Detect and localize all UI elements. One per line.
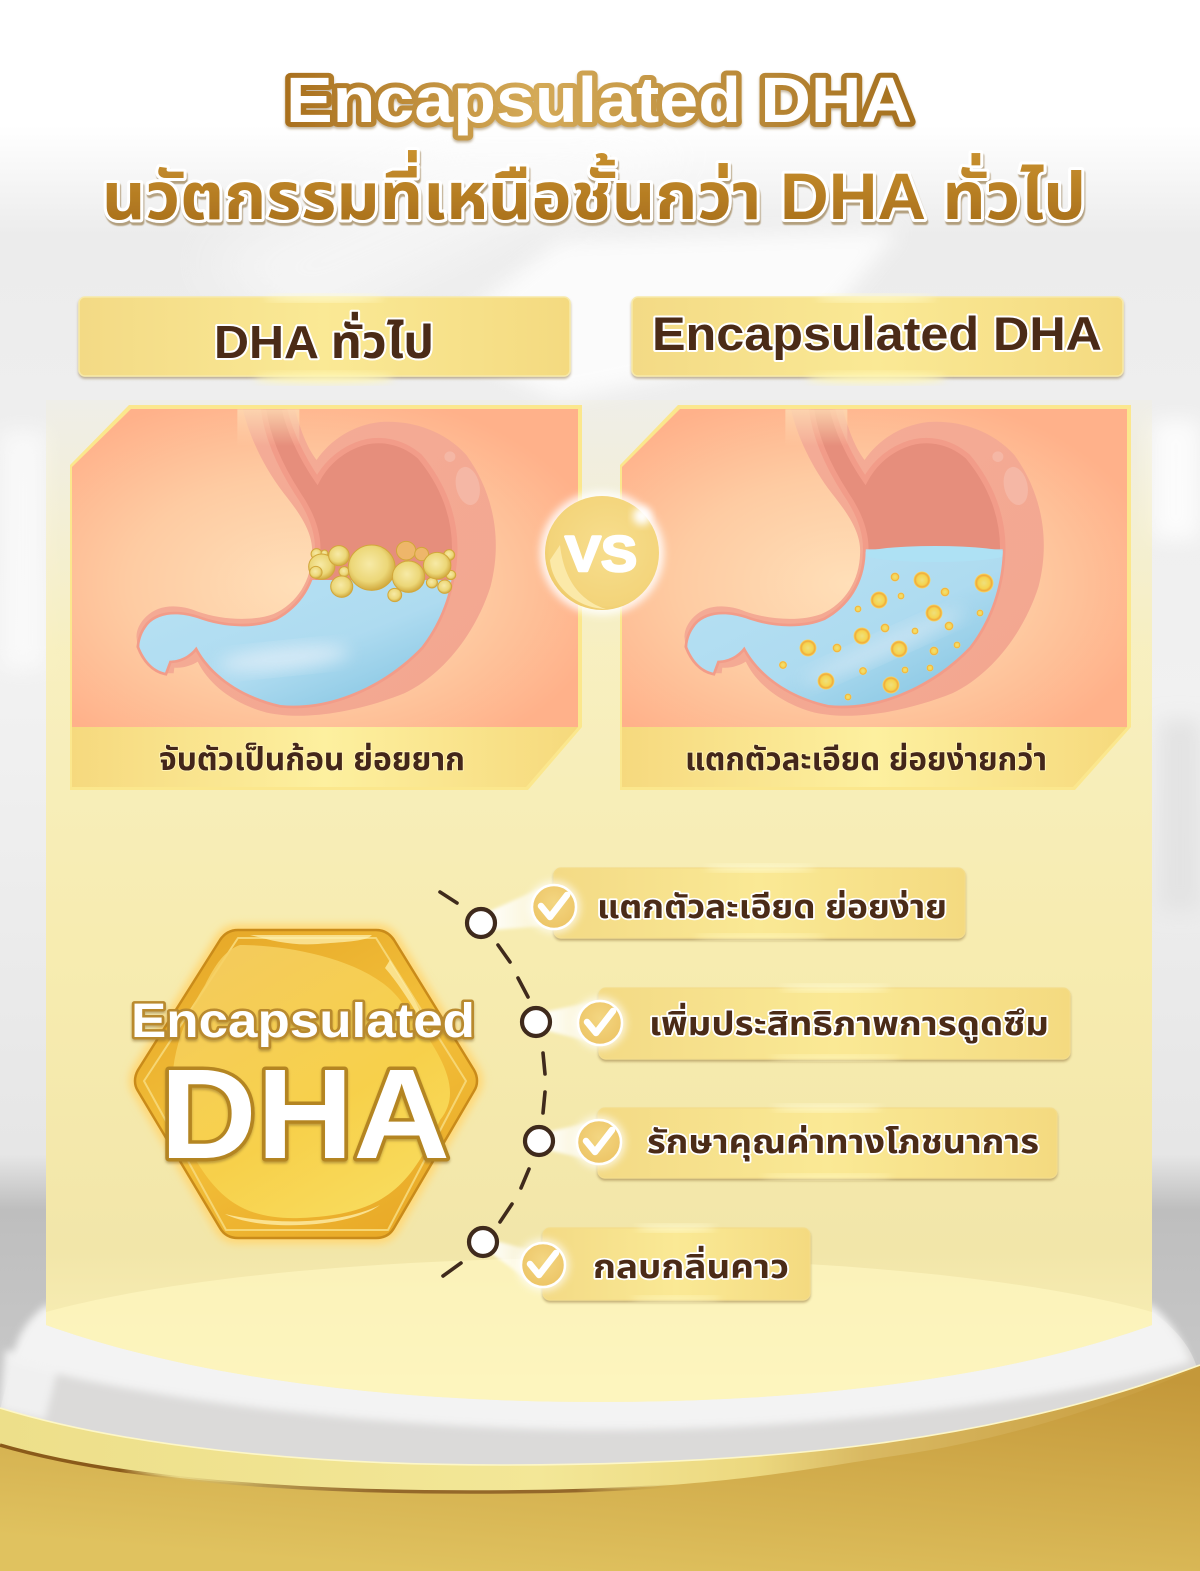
icon: check 3 <box>573 1116 625 1168</box>
badge word: DHA: DHA <box>160 1043 450 1186</box>
dissolved DHA droplets <box>779 572 994 700</box>
translucent yellow panel <box>46 400 1152 1402</box>
caption strip left <box>72 727 578 787</box>
panel: encapsulated DHA stomach <box>620 405 1131 790</box>
caption strip right <box>622 727 1127 787</box>
benefit pill 3 <box>573 1105 1057 1180</box>
gold wave footer <box>0 1365 1200 1571</box>
benefit pill 4: กลบกลิ่นคาว <box>593 1245 789 1285</box>
benefit pill 1: แตกตัวละเอียด ย่อยง่าย <box>597 888 947 925</box>
VS badge <box>540 491 664 615</box>
honeycomb badge: Encapsulated DHA <box>131 930 477 1238</box>
title line 2: นวัตกรรมที่เหนือชั้นกว่า DHA ทั่วไป <box>102 150 1086 233</box>
stomach illustration left <box>129 406 496 720</box>
panel: general DHA stomach <box>70 405 582 790</box>
header: DHA general: DHA ทั่วไป <box>214 312 434 368</box>
podium top ellipse <box>46 1258 1152 1402</box>
dashed timeline with nodes <box>440 886 590 1282</box>
VS badge: VS <box>565 526 637 582</box>
stomach illustration right <box>677 406 1044 723</box>
title <box>102 64 1086 233</box>
header: Encapsulated DHA: Encapsulated DHA <box>652 307 1102 360</box>
icon: check 1 <box>528 881 580 933</box>
benefit pill 2 <box>574 985 1070 1060</box>
caption strip left: จับตัวเป็นก้อน ย่อยยาก <box>159 741 465 777</box>
gold DHA clump <box>309 541 456 602</box>
white podium <box>0 1305 1200 1480</box>
icon: check 4 <box>517 1239 569 1291</box>
icon: check 2 <box>574 997 626 1049</box>
benefit pill 3: รักษาคุณค่าทางโภชนาการ <box>647 1123 1039 1162</box>
benefit pill 2: เพิ่มประสิทธิภาพการดูดซึม <box>649 1002 1049 1044</box>
header: Encapsulated DHA <box>632 295 1123 383</box>
badge word: Encapsulated: Encapsulated <box>131 995 475 1048</box>
beams from nodes to check icons <box>488 886 590 1282</box>
benefit pill 1 <box>528 865 965 940</box>
header: DHA general <box>79 295 570 383</box>
benefit pill 4 <box>517 1225 810 1302</box>
title line 1: Encapsulated DHA <box>286 64 912 136</box>
caption strip right: แตกตัวละเอียด ย่อยง่ายกว่า <box>685 741 1047 777</box>
